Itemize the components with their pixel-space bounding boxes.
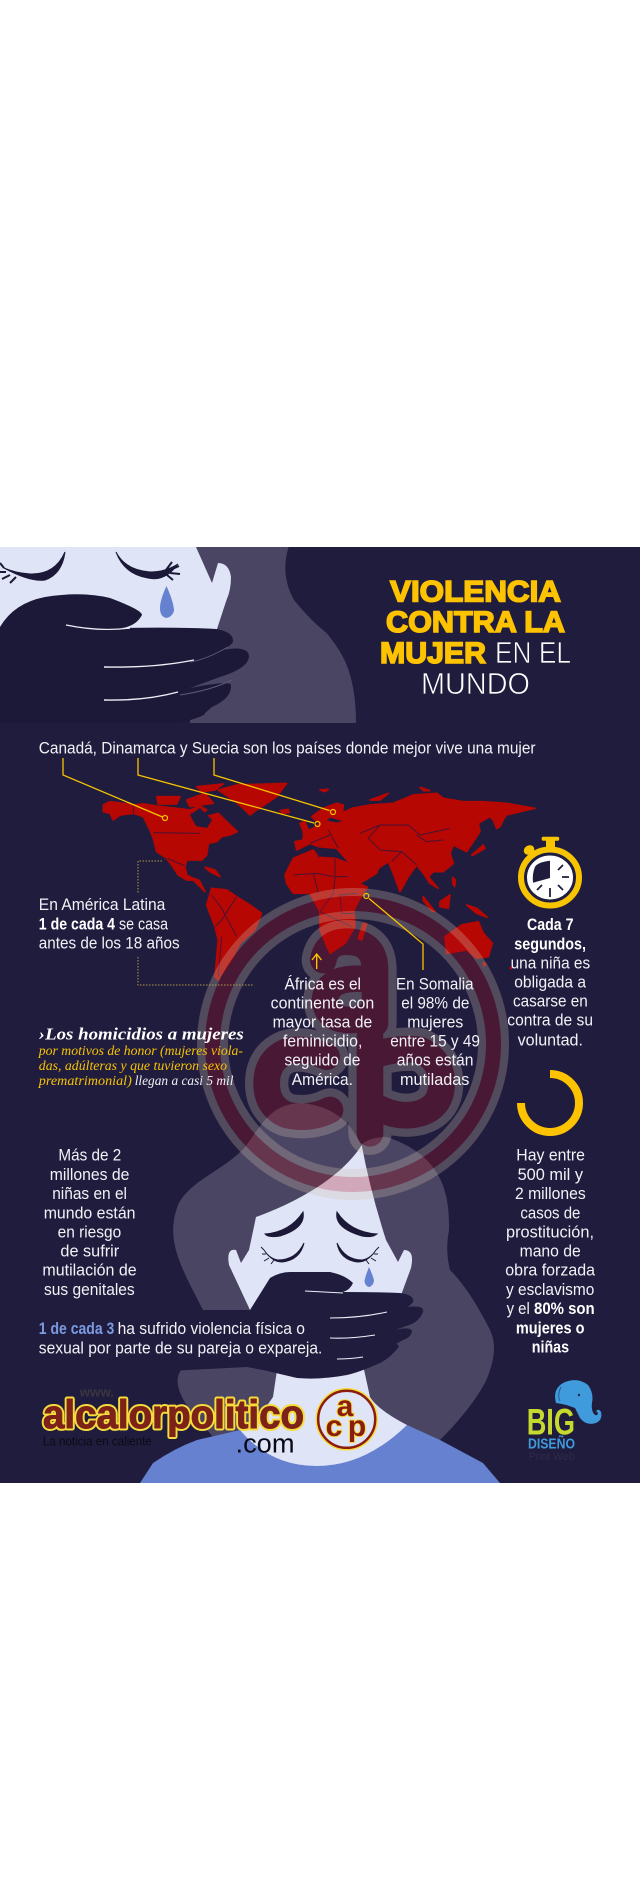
title: MUNDO — [421, 666, 530, 701]
text: genital mutilation: en riesgo — [58, 1222, 121, 1241]
logo: alcalorpolitico: alcalorpolitico — [43, 1393, 304, 1437]
text: Latin America: En América Latina — [39, 895, 166, 914]
logo: alcalorpolitico — [43, 1385, 376, 1459]
title: VIOLENCIA — [390, 576, 561, 609]
text: prostitution and slavery: 80% son — [534, 1299, 595, 1318]
heading: best countries: Canadá, Dinamarca y Suecia son los países donde mejor vive una mujer — [39, 738, 536, 757]
icon: ring gauge — [521, 1074, 579, 1132]
text: prostitution and slavery: mano de — [520, 1242, 581, 1261]
text: Latin America — [39, 895, 180, 953]
text: honor killings: por motivos de honor (mujeres viola- — [38, 1044, 243, 1059]
neck — [240, 1365, 407, 1466]
text: prostitution and slavery: niñas — [532, 1337, 569, 1356]
text: Africa: feminicidio, — [283, 1032, 362, 1051]
tear — [364, 1267, 374, 1287]
text: Africa: continente con — [271, 993, 374, 1012]
text: prostitution and slavery: 2 millones — [515, 1184, 586, 1203]
text: genital mutilation: niñas en el — [52, 1184, 127, 1203]
text: prostitution and slavery: 500 mil y — [518, 1165, 583, 1184]
text: prostitution and slavery: prostitución, — [506, 1222, 594, 1241]
hudson bay — [190, 808, 212, 828]
text: Latin America: antes de los 18 años — [39, 934, 180, 953]
brows and eyes — [261, 1212, 379, 1264]
text: genital mutilation: sus genitales — [44, 1280, 135, 1299]
text: every 7 seconds: una niña es — [511, 953, 590, 972]
shirt — [140, 1425, 500, 1483]
title: EN EL — [495, 635, 571, 670]
text: honor killings: das, adúlteras y que tuvieron sexo — [39, 1059, 227, 1074]
logo: acp badge: p — [348, 1410, 366, 1443]
logo: alcalorpolitico: .com — [236, 1429, 294, 1459]
icon: stopwatch — [521, 837, 579, 906]
logo: BIG diseño: DISEÑO — [528, 1434, 575, 1452]
americas and greenland — [103, 783, 287, 980]
title: MUJER — [380, 637, 486, 670]
title: CONTRA LA — [386, 606, 565, 639]
text: every 7 seconds: casarse en — [513, 992, 588, 1011]
world map — [103, 783, 535, 980]
text: Africa: mayor tasa de — [273, 1012, 372, 1031]
text: honor killings: ›Los homicidios a mujeres — [39, 1024, 244, 1043]
eurasia, africa, oceania — [280, 787, 535, 966]
logo: alcalorpolitico: alcalorpolitico — [43, 1393, 304, 1437]
watermark: acp circle — [212, 904, 494, 1184]
text: prostitution and slavery — [505, 1146, 596, 1356]
illustration: bottom woman — [140, 1103, 500, 1483]
text: every 7 seconds: obligada a — [514, 973, 586, 992]
text: Somalia: mujeres — [407, 1012, 463, 1031]
dotted bracket: Latin America — [138, 861, 253, 985]
text: Somalia: mutiladas — [400, 1070, 469, 1089]
text: genital mutilation: Más de 2 — [58, 1146, 121, 1165]
arrow: Africa — [312, 954, 321, 969]
text: every 7 seconds: Cada 7 — [527, 915, 574, 934]
text: genital mutilation: de sufrir — [60, 1242, 120, 1261]
text: Latin America: se casa — [119, 914, 168, 933]
text: Africa: seguido de — [284, 1051, 360, 1070]
icon: elephant — [555, 1380, 601, 1424]
text: Latin America: 1 de cada 4 — [39, 914, 115, 933]
text: honor killings: llegan a casi 5 mil — [135, 1074, 234, 1089]
hair — [173, 1103, 494, 1440]
logo: BIG diseño: Print Web — [529, 1451, 575, 1463]
text: prostitution and slavery: y el — [507, 1299, 530, 1318]
text: prostitution and slavery: y esclavismo — [506, 1280, 594, 1299]
logo: acp badge: a — [337, 1390, 354, 1423]
text: Africa: América. — [292, 1070, 353, 1089]
text: genital mutilation: mutilación de — [42, 1261, 137, 1280]
text: honor killings — [38, 1024, 244, 1089]
text: Somalia: el 98% de — [401, 993, 469, 1012]
text: 1 in 3: sexual por parte de su pareja o expareja. — [39, 1338, 322, 1357]
text: genital mutilation: millones de — [50, 1165, 129, 1184]
logo: alcalorpolitico: La noticia en caliente — [43, 1434, 152, 1449]
text: 1 in 3 — [39, 1319, 322, 1357]
logo: acp badge: c — [326, 1410, 342, 1443]
text: prostitution and slavery: Hay entre — [516, 1146, 585, 1165]
logo: BIG diseño — [527, 1380, 601, 1463]
text: prostitution and slavery: obra forzada — [505, 1261, 596, 1280]
map leader lines and markers — [63, 758, 423, 970]
stray map dot — [510, 967, 512, 969]
text: every 7 seconds — [507, 915, 593, 1050]
text: genital mutilation: mundo están — [44, 1203, 136, 1222]
text: prostitution and slavery: casos de — [520, 1203, 580, 1222]
text: every 7 seconds: contra de su — [507, 1011, 593, 1030]
text: honor killings: prematrimonial) — [38, 1074, 132, 1089]
text: every 7 seconds: voluntad. — [518, 1031, 583, 1050]
text: Somalia: años están — [397, 1051, 474, 1070]
logo: alcalorpolitico: www. — [79, 1385, 114, 1400]
text: every 7 seconds: segundos, — [514, 934, 586, 953]
logo: acp badge — [317, 1390, 376, 1449]
text: 1 in 3: ha sufrido violencia física o — [118, 1319, 305, 1338]
text: Somalia: entre 15 y 49 — [390, 1032, 480, 1051]
text: genital mutilation — [42, 1146, 137, 1299]
illustration: top face and hand — [0, 547, 356, 723]
text: Africa — [271, 974, 374, 1089]
logo: BIG diseño: BIG — [527, 1402, 575, 1442]
text: Africa: África es el — [284, 974, 361, 993]
background panel — [0, 547, 640, 1483]
text: Somalia: En Somalia — [396, 974, 474, 993]
hand — [150, 1272, 423, 1379]
text: 1 in 3: 1 de cada 3 — [39, 1319, 114, 1338]
text: Somalia — [390, 974, 480, 1089]
text: prostitution and slavery: mujeres o — [516, 1318, 584, 1337]
title — [380, 576, 571, 701]
face — [228, 1145, 412, 1310]
